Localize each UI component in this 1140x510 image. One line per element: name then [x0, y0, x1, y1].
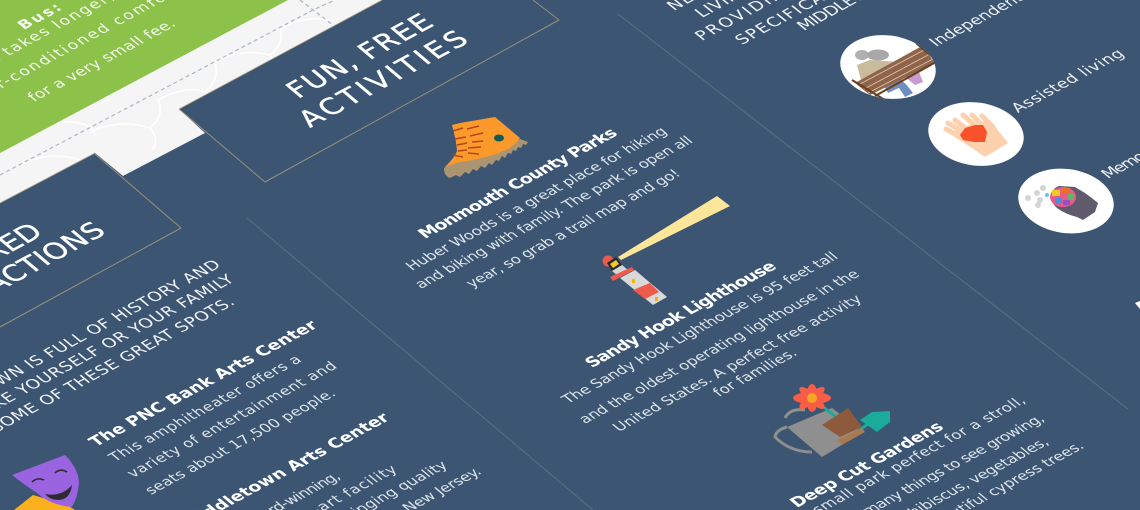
panel: featured attractions: [0, 217, 485, 510]
Monmouth County Parks: year, so grab a trail map and go!: [462, 167, 684, 291]
PNC Bank Arts Center: This amphitheater offers a: [104, 353, 305, 465]
icon: memory care brain: [1014, 163, 1118, 239]
transport text: Bus:: [13, 0, 66, 33]
icon: independent living bench: [840, 35, 936, 99]
panel: senior living: [662, 0, 1140, 239]
panel: transport green: [0, 0, 288, 153]
Monmouth County Parks: Huber Woods is a great place for hiking: [402, 125, 671, 274]
Deep Cut Gardens: Deep Cut Gardens: [785, 418, 948, 510]
Sandy Hook Lighthouse: Sandy Hook Lighthouse: [580, 258, 781, 371]
PNC Bank Arts Center: The PNC Bank Arts Center: [84, 316, 322, 450]
intro text: [662, 0, 904, 47]
Sandy Hook Lighthouse: The Sandy Hook Lighthouse is 95 feet tall: [557, 249, 842, 407]
PNC Bank Arts Center: seats about 17,500 people.: [141, 387, 340, 498]
PNC Bank Arts Center: [84, 316, 341, 498]
icon: lighthouse: [602, 196, 730, 305]
icon: theater masks: [12, 455, 79, 510]
Monmouth County Parks: and biking with family. The park is open all: [411, 133, 697, 292]
right tab outline: [179, 0, 559, 182]
Sandy Hook Lighthouse: for families.: [709, 346, 801, 400]
Sandy Hook Lighthouse: and the oldest operating lighthouse in the: [575, 267, 863, 427]
left tab outline: [0, 154, 181, 327]
icon: boot: [444, 117, 528, 178]
column dividers: [247, 14, 1128, 510]
icon: garden tools: [775, 384, 890, 457]
label: assisted living: Assisted living: [1006, 46, 1128, 115]
Middletown Arts Center: [177, 409, 485, 510]
panel: fun free activities: [279, 9, 1088, 510]
heading: fun free activities: FUN, FREE: [279, 9, 441, 103]
PNC Bank Arts Center: variety of entertainment and: [123, 359, 341, 481]
Monmouth County Parks: Monmouth County Parks: [413, 124, 622, 242]
heading: fun free activities: ACTIVITIES: [291, 26, 475, 132]
icon: assisted living hands: [924, 96, 1028, 172]
transport text: for a very small fee.: [23, 16, 180, 105]
Sandy Hook Lighthouse: United States. A perfect free activity: [609, 292, 866, 435]
